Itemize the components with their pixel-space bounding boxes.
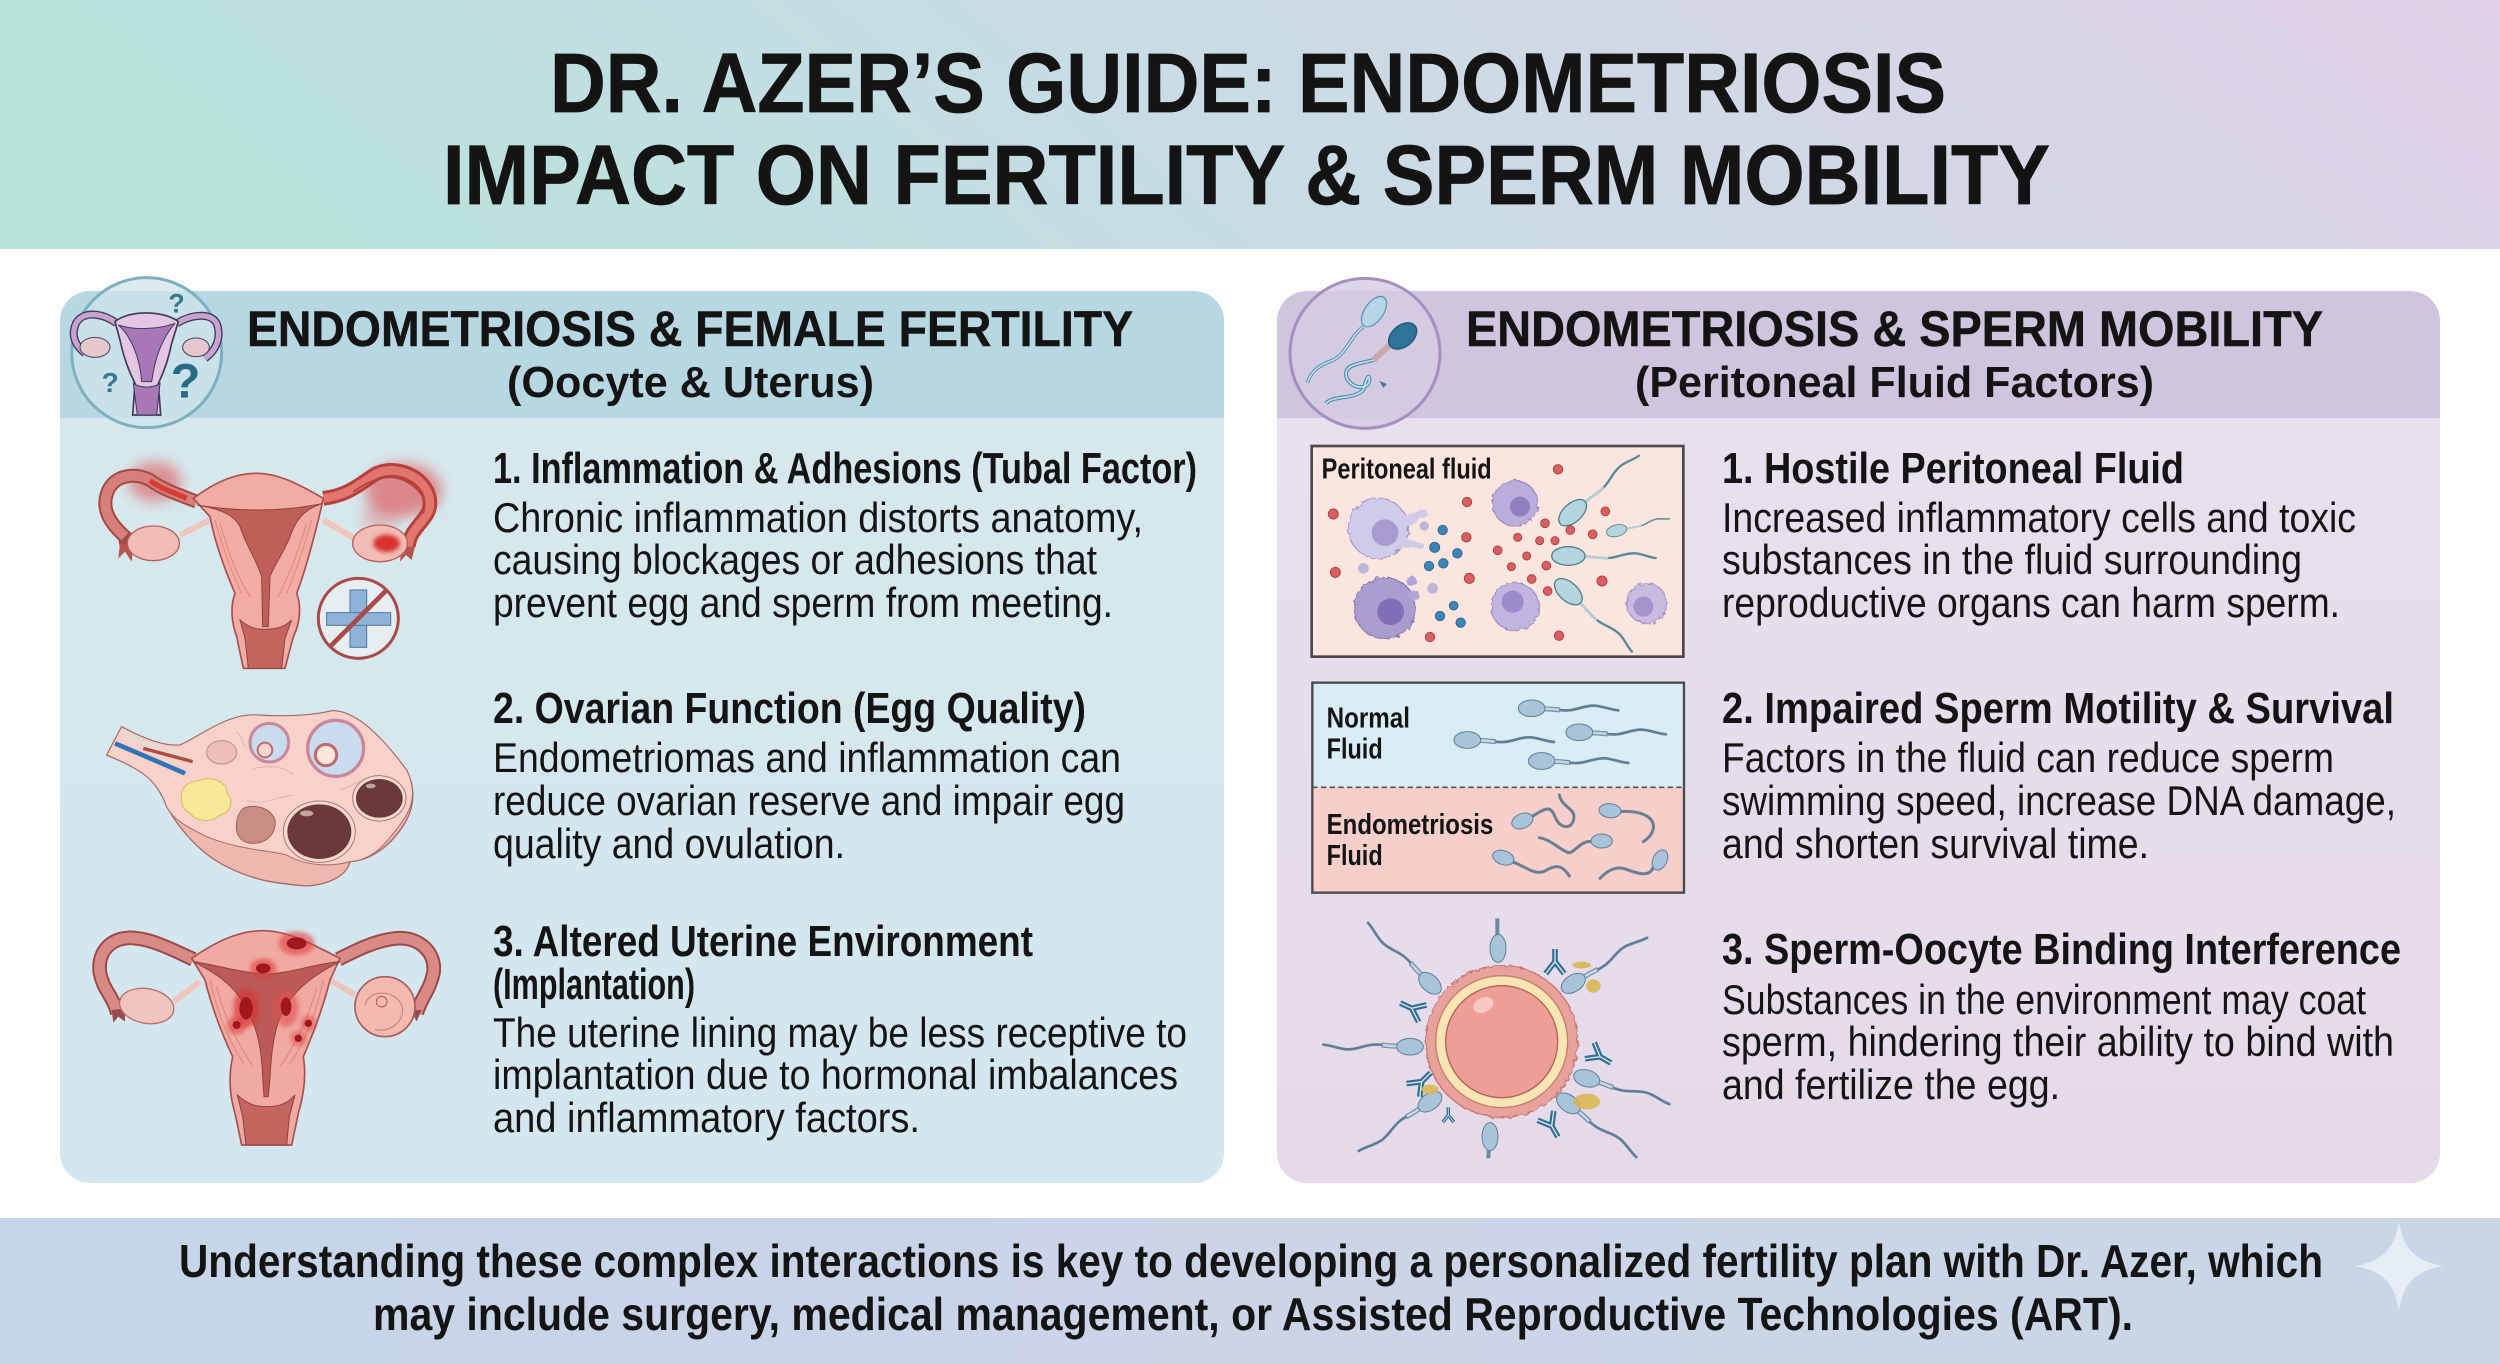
item text: sperm-oocyte binding interference: sperm, hindering their ability to bind with [1722, 1018, 2394, 1065]
item text: inflammation and adhesions: 1. Inflammation & Adhesions (Tubal Factor) [493, 444, 1197, 493]
label: Peritoneal fluid [1322, 453, 1492, 485]
item text: sperm-oocyte binding interference: Substances in the environment may coat [1722, 976, 2366, 1023]
panel subheading: (Oocyte & Uterus) [507, 358, 874, 407]
antibodies [1396, 949, 1616, 1142]
item text: impaired sperm motility: Factors in the fluid can reduce sperm [1722, 734, 2334, 781]
illustration: inflamed uterus and blocked tube [105, 462, 442, 668]
icon: blocked tube prohibition sign [318, 578, 398, 658]
item text: altered uterine environment: (Implantation) [493, 960, 695, 1009]
item text: sperm-oocyte binding interference: 3. Sperm-Oocyte Binding Interference [1722, 925, 2401, 974]
item text: ovarian function [493, 684, 1125, 867]
icon: uterus with question marks: ? [168, 289, 185, 319]
item text: altered uterine environment: implantation due to hormonal imbalances [493, 1051, 1178, 1098]
illustration: ovary with endometriomas [107, 711, 413, 886]
damaged sperm [1550, 447, 1671, 657]
item text: sperm-oocyte binding interference [1722, 925, 2401, 1108]
item text: ovarian function: 2. Ovarian Function (Egg Quality) [493, 684, 1086, 733]
icon: sparkle star [2355, 1222, 2443, 1310]
item text: impaired sperm motility: 2. Impaired Sperm Motility & Survival [1722, 684, 2394, 733]
title line 2: IMPACT ON FERTILITY & SPERM MOBILITY [443, 128, 2050, 222]
item text: hostile peritoneal fluid: Increased inflammatory cells and toxic [1722, 494, 2356, 541]
coating substances [1421, 962, 1601, 1110]
item text: altered uterine environment: 3. Altered Uterine Environment [493, 917, 1033, 966]
item text: ovarian function: reduce ovarian reserve and impair egg [493, 777, 1125, 824]
icon: two sperm in circle [1290, 278, 1440, 428]
red inflammatory dots [1328, 465, 1610, 642]
normal sperm [1454, 700, 1666, 769]
abnormal sperm [1491, 795, 1671, 878]
title line 1: DR. AZER’S GUIDE: ENDOMETRIOSIS [550, 36, 1946, 130]
item text: hostile peritoneal fluid: 1. Hostile Peritoneal Fluid [1722, 444, 2184, 493]
item text: ovarian function: quality and ovulation. [493, 820, 845, 867]
panel: endometriosis and sperm mobility [1277, 278, 2440, 1183]
panel subheading: (Peritoneal Fluid Factors) [1635, 358, 2154, 407]
panel heading: ENDOMETRIOSIS & FEMALE FERTILITY [247, 301, 1133, 357]
item text: inflammation and adhesions: prevent egg and sperm from meeting. [493, 579, 1113, 626]
normal fluid label [1327, 702, 1410, 765]
item text: altered uterine environment [493, 917, 1187, 1141]
item text: inflammation and adhesions: Chronic inflammation distorts anatomy, [493, 494, 1143, 541]
implants [227, 931, 316, 1046]
item text: impaired sperm motility [1722, 684, 2396, 867]
item text: altered uterine environment: The uterine lining may be less receptive to [493, 1009, 1187, 1056]
item text: sperm-oocyte binding interference: and fertilize the egg. [1722, 1061, 2060, 1108]
normal fluid label: Normal [1327, 702, 1410, 734]
item text: impaired sperm motility: swimming speed, increase DNA damage, [1722, 777, 2396, 824]
footer text: may include surgery, medical management, or Assisted Reproductive Technologies (ART). [373, 1288, 2133, 1340]
item text: hostile peritoneal fluid [1722, 444, 2356, 626]
blue toxin dots [1424, 525, 1465, 627]
panel: endometriosis and female fertility [60, 278, 1224, 1183]
illustration: peritoneal fluid box [1312, 446, 1683, 657]
footer text [179, 1235, 2323, 1340]
illustration: egg surrounded by sperm and antibodies [1323, 918, 1672, 1162]
item text: inflammation and adhesions: causing blockages or adhesions that [493, 536, 1097, 583]
normal fluid label: Fluid [1327, 733, 1383, 765]
item text: altered uterine environment: and inflammatory factors. [493, 1094, 920, 1141]
item text: hostile peritoneal fluid: substances in the fluid surrounding [1722, 536, 2302, 583]
illustration: uterus with implants and embryo [100, 931, 434, 1145]
item text: inflammation and adhesions [493, 444, 1197, 626]
egg [1426, 966, 1578, 1118]
item text: hostile peritoneal fluid: reproductive organs can harm sperm. [1722, 579, 2340, 626]
endometriosis fluid label: Endometriosis [1327, 809, 1493, 841]
illustration: normal vs endometriosis fluid box [1312, 683, 1684, 893]
panel heading: ENDOMETRIOSIS & SPERM MOBILITY [1466, 301, 2323, 357]
title banner [0, 0, 2500, 249]
sperm around egg [1323, 918, 1672, 1162]
immune cells [1348, 481, 1667, 639]
footer banner [0, 1218, 2500, 1364]
endometriosis fluid label: Fluid [1327, 840, 1383, 872]
icon: uterus with question marks: ? [102, 367, 119, 398]
endometriosis fluid label [1327, 809, 1493, 872]
icon: uterus with question marks: ? [171, 354, 200, 408]
icon: uterus with question marks [72, 278, 222, 428]
item text: ovarian function: Endometriomas and inflammation can [493, 734, 1121, 781]
item text: impaired sperm motility: and shorten survival time. [1722, 820, 2149, 867]
